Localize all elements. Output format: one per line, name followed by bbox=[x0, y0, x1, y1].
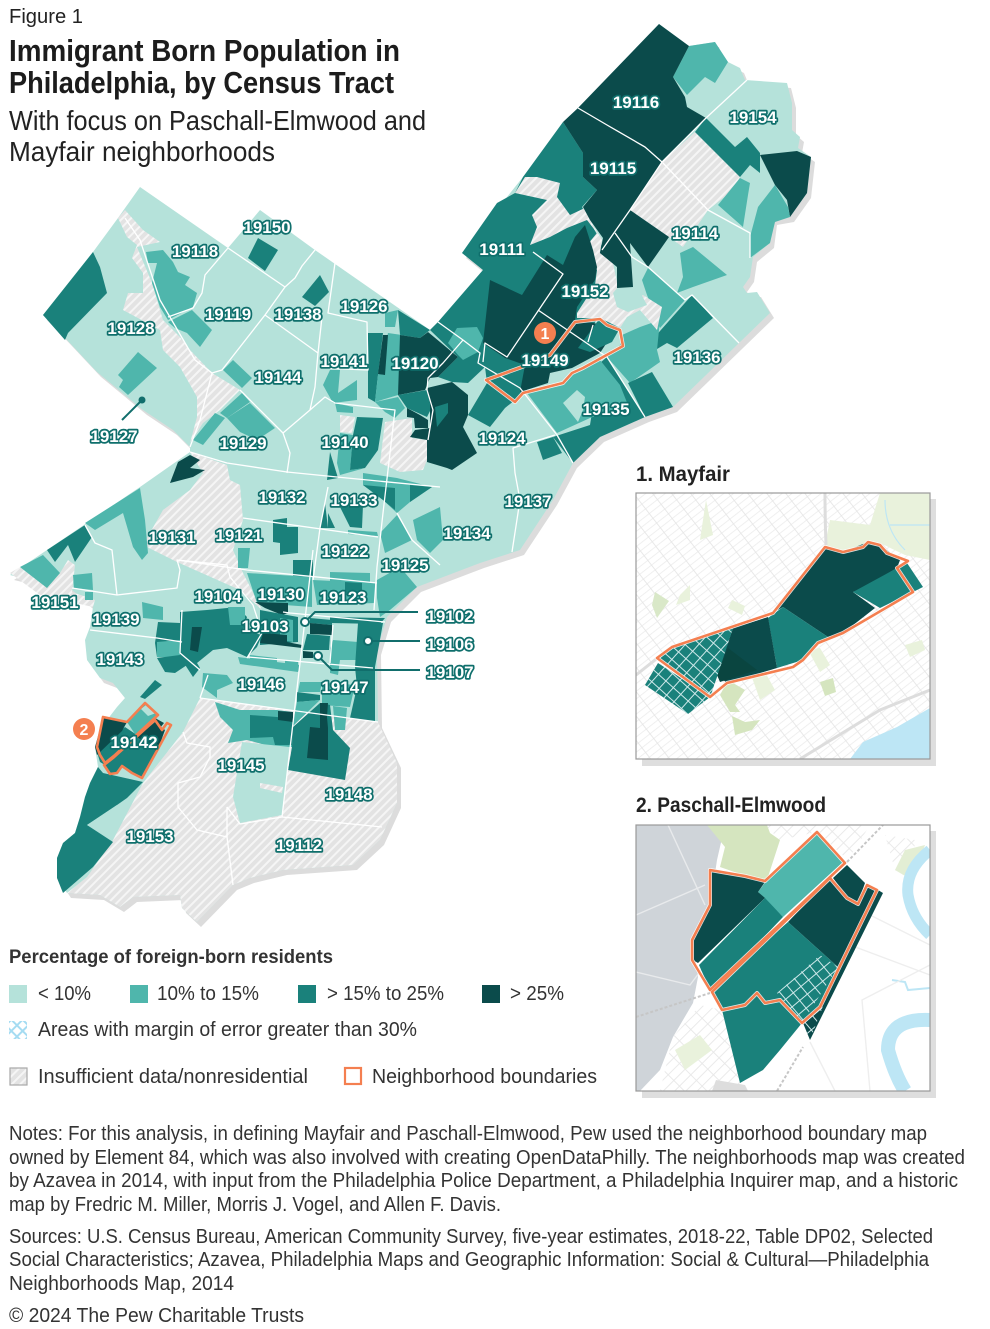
city base, under 10 percent bbox=[10, 24, 811, 922]
legend item: insufficient data: Insufficient data/nonresidential bbox=[38, 1066, 308, 1088]
ZIP code labels: 19142 bbox=[110, 733, 158, 752]
badge 1 bbox=[534, 322, 556, 344]
notes: map by Fredric M. Miller, Morris J. Vogel, and Allen F. Davis. bbox=[9, 1194, 501, 1216]
Mayfair boundary bbox=[657, 542, 913, 697]
ZIP code labels: 19124 bbox=[478, 429, 526, 448]
legend item: 15 to 25 percent: > 15% to 25% bbox=[327, 983, 444, 1005]
title bbox=[9, 33, 400, 100]
central north tracts bbox=[238, 310, 477, 583]
sources: Sources: U.S. Census Bureau, American Community Survey, five-year estimates, 2018-22, Table DP02, Selected bbox=[9, 1226, 933, 1248]
ZIP code labels: 19147 bbox=[321, 678, 369, 697]
legend item: over 25 percent bbox=[482, 983, 564, 1005]
ZIP code labels: 19146 bbox=[237, 675, 285, 694]
ZIP code labels: 19144 bbox=[254, 368, 302, 387]
ZIP code labels: 19143 bbox=[96, 650, 144, 669]
ZIP code labels: 19123 bbox=[319, 588, 367, 607]
subtitle bbox=[9, 105, 426, 167]
ZIP code labels: 19135 bbox=[582, 400, 630, 419]
ZIP code labels: 19136 bbox=[673, 348, 721, 367]
ZIP code labels: 19127 bbox=[90, 427, 138, 446]
ZIP code labels: 19145 bbox=[217, 756, 265, 775]
legend bbox=[9, 947, 597, 1088]
ZIP code labels: 19138 bbox=[274, 305, 322, 324]
ZIP code labels: 19119 bbox=[205, 305, 251, 324]
subtitle: Mayfair neighborhoods bbox=[9, 136, 275, 167]
ZIP code labels: 19149 bbox=[521, 351, 569, 370]
ZIP code labels: 19118 bbox=[172, 242, 218, 261]
inset map: Paschall-Elmwood bbox=[636, 825, 936, 1098]
notes: Notes: For this analysis, in defining Mayfair and Paschall-Elmwood, Pew used the neighborhood boundary map bbox=[9, 1123, 927, 1145]
ZIP code labels: 19103 bbox=[241, 617, 289, 636]
legend item: 10 to 15 percent: 10% to 15% bbox=[157, 983, 259, 1005]
ZIP code labels: 19150 bbox=[243, 218, 291, 237]
ZIP code labels: 19104 bbox=[194, 587, 242, 606]
ZIP code labels: 19139 bbox=[92, 610, 140, 629]
inset heading: Paschall-Elmwood: 2. Paschall-Elmwood bbox=[636, 794, 826, 817]
leader: 19106 bbox=[364, 637, 420, 645]
ZIP code labels: 19112 bbox=[276, 836, 322, 855]
ZIP code labels: 19116 bbox=[613, 93, 659, 112]
Paschall-Elmwood boundary bbox=[692, 832, 877, 1023]
northeast tracts bbox=[430, 24, 811, 463]
ZIP code labels: 19141 bbox=[320, 352, 368, 371]
ZIP code labels: 19140 bbox=[321, 433, 369, 452]
ZIP code labels: 19131 bbox=[148, 528, 196, 547]
badge 2: 2 bbox=[80, 722, 89, 739]
ZIP code boundaries bbox=[72, 80, 750, 885]
badge 1: 1 bbox=[541, 326, 550, 343]
ZIP code labels: 19152 bbox=[561, 282, 609, 301]
legend item: under 10 percent: < 10% bbox=[38, 983, 91, 1005]
neighborhood outline: Mayfair on the map bbox=[486, 319, 623, 402]
copyright: © 2024 The Pew Charitable Trusts bbox=[9, 1305, 304, 1327]
west and southwest tracts bbox=[20, 488, 262, 699]
ZIP code labels: 19107 bbox=[426, 663, 474, 682]
ZIP code labels: 19148 bbox=[325, 785, 373, 804]
ZIP code labels: 19111 bbox=[479, 240, 525, 259]
legend item: under 10 percent bbox=[9, 983, 91, 1005]
ZIP code labels: 19125 bbox=[381, 556, 429, 575]
legend heading: Percentage of foreign-born residents bbox=[9, 947, 333, 968]
figure label: Figure 1 bbox=[9, 6, 83, 28]
ZIP code labels: 19137 bbox=[504, 492, 552, 511]
notes bbox=[9, 1123, 965, 1216]
ZIP code labels: 19151 bbox=[31, 593, 79, 612]
badge 2 bbox=[73, 718, 95, 740]
leader: 19102 bbox=[301, 612, 418, 626]
ZIP code labels: 19120 bbox=[391, 354, 439, 373]
nonresidential areas bbox=[10, 132, 740, 922]
neighborhood outline: Paschall-Elmwood on the map bbox=[97, 703, 171, 778]
center city and south tracts bbox=[202, 560, 417, 823]
inset map: Mayfair bbox=[636, 493, 936, 766]
southwest river tracts bbox=[57, 703, 165, 893]
legend item: neighborhood boundaries: Neighborhood boundaries bbox=[372, 1066, 597, 1088]
ZIP code labels: 19153 bbox=[126, 827, 174, 846]
ZIP code labels: 19115 bbox=[590, 159, 636, 178]
ZIP code labels: 19132 bbox=[258, 488, 306, 507]
ZIP code labels: 19102 bbox=[426, 607, 474, 626]
northwest tracts bbox=[43, 238, 329, 483]
ZIP code labels bbox=[31, 93, 777, 855]
city shadow bbox=[14, 29, 815, 927]
ZIP code labels: 19129 bbox=[219, 434, 267, 453]
leader: 19107 bbox=[314, 652, 420, 670]
title: Philadelphia, by Census Tract bbox=[9, 65, 394, 100]
subtitle: With focus on Paschall-Elmwood and bbox=[9, 105, 426, 136]
legend item: margin of error: Areas with margin of error greater than 30% bbox=[38, 1019, 417, 1041]
choropleth map of Philadelphia bbox=[10, 24, 815, 927]
ZIP code labels: 19154 bbox=[729, 108, 777, 127]
ZIP code labels: 19121 bbox=[215, 526, 263, 545]
ZIP code labels: 19134 bbox=[443, 524, 491, 543]
sources: Neighborhoods Map, 2014 bbox=[9, 1273, 234, 1295]
ZIP code labels: 19133 bbox=[330, 491, 378, 510]
notes: by Azavea in 2014, with input from the Philadelphia Police Department, a Philadelphia Inquirer map, and a historic bbox=[9, 1170, 958, 1192]
inset heading: Mayfair: 1. Mayfair bbox=[636, 463, 730, 486]
ZIP code labels: 19122 bbox=[321, 542, 369, 561]
ZIP code labels: 19128 bbox=[107, 319, 155, 338]
ZIP code labels: 19106 bbox=[426, 635, 474, 654]
title: Immigrant Born Population in bbox=[9, 33, 400, 68]
ZIP code labels: 19114 bbox=[672, 224, 719, 243]
legend item: over 25 percent: > 25% bbox=[510, 983, 564, 1005]
ZIP code labels: 19130 bbox=[257, 585, 305, 604]
sources: Social Characteristics; Azavea, Philadelphia Maps and Geographic Information: Social & Cultural—Philadelphia bbox=[9, 1249, 930, 1271]
leader: 19127 bbox=[122, 396, 146, 420]
sources bbox=[9, 1226, 933, 1295]
ZIP code labels: 19126 bbox=[340, 297, 388, 316]
